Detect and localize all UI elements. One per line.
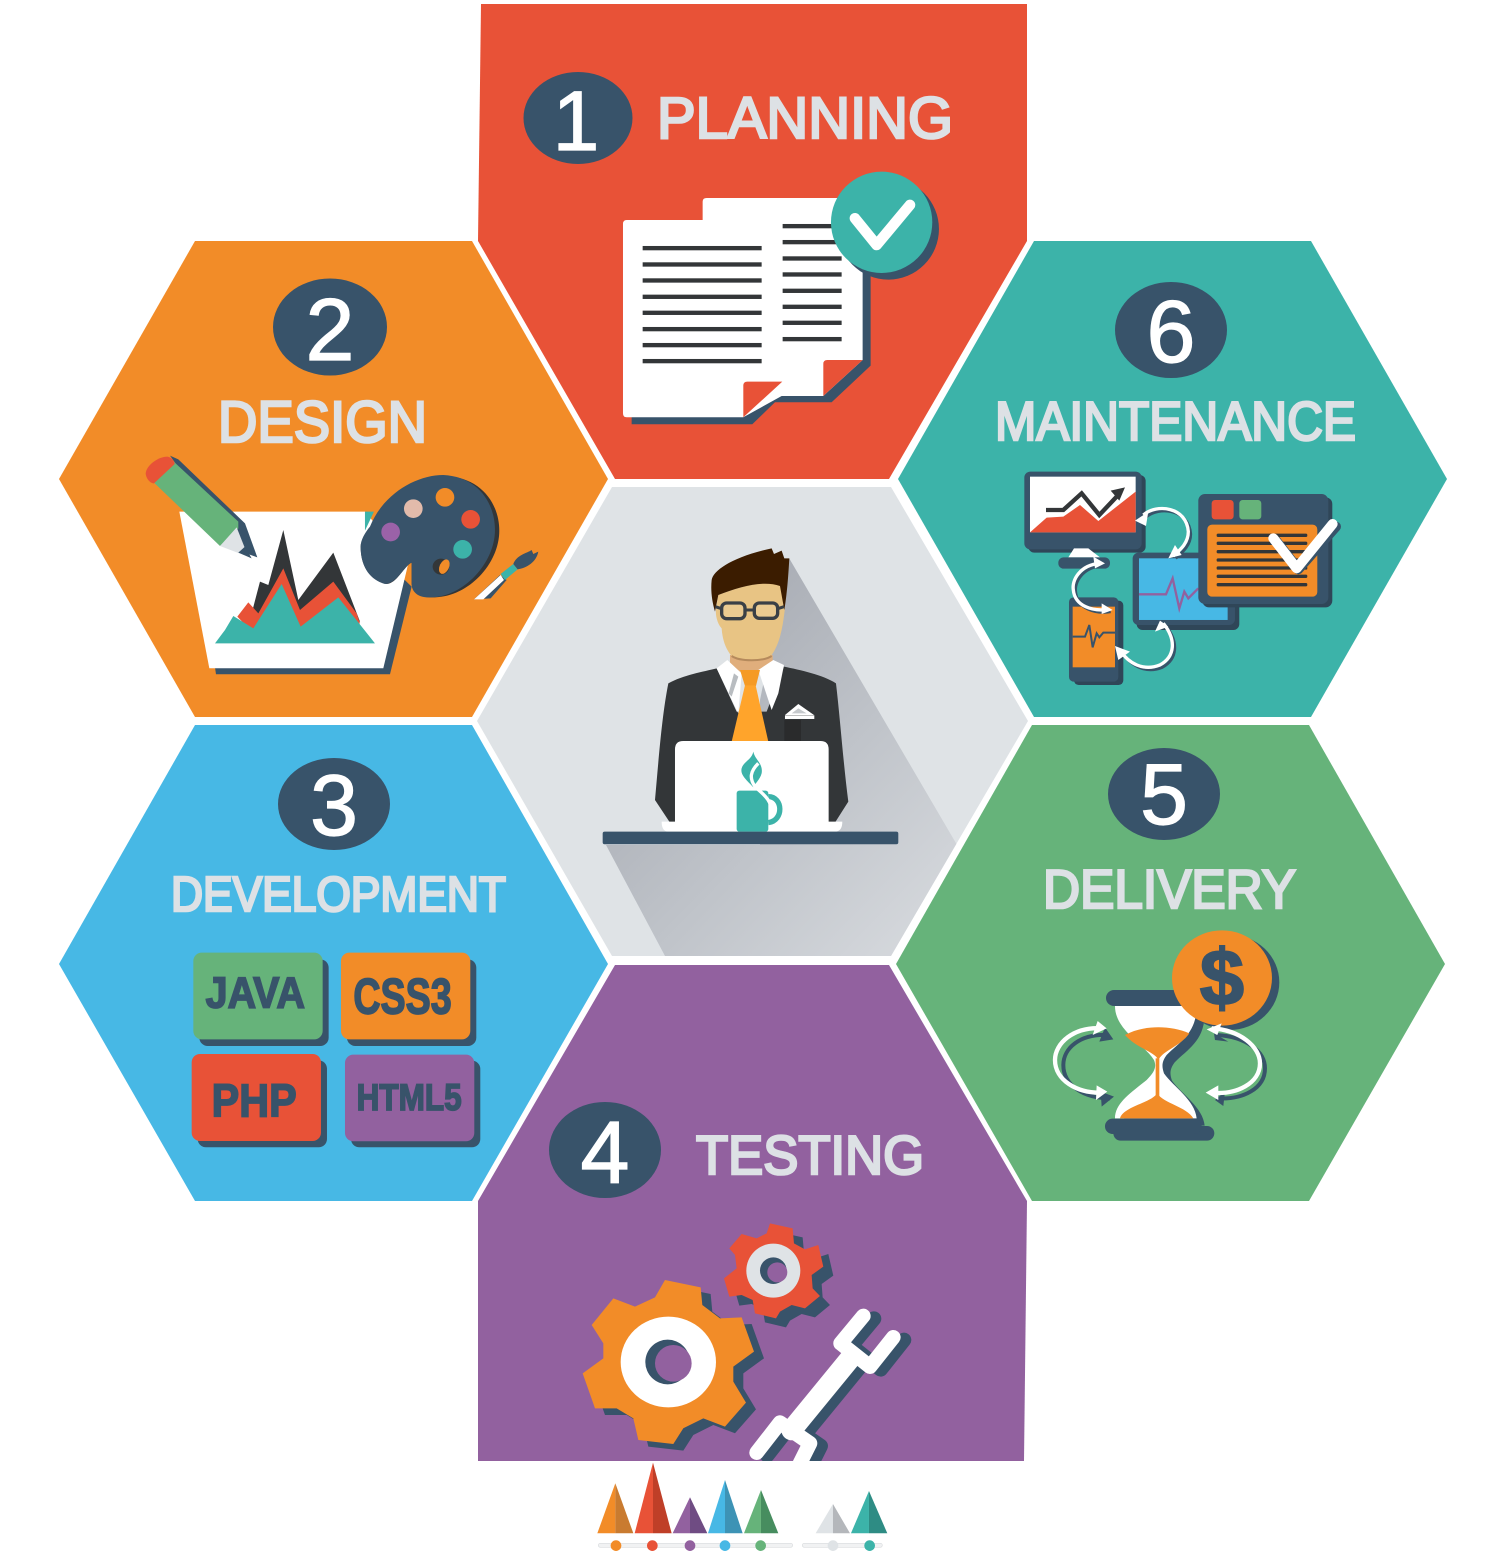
- triangle: orange: [597, 1483, 633, 1551]
- heading: planning: PLANNING: [657, 86, 953, 151]
- heading: development: DEVELOPMENT: [171, 868, 506, 922]
- icon: businessman at laptop: [603, 548, 898, 844]
- icon: documents with check mark: [623, 172, 939, 424]
- triangle: teal: [851, 1491, 887, 1551]
- panel: 3 development: [59, 725, 608, 1201]
- tile: css3: CSS3: [353, 968, 452, 1024]
- number badge 3: 3: [310, 758, 358, 854]
- number badge 6: 6: [1147, 282, 1195, 381]
- number badge 4: 4: [581, 1103, 629, 1202]
- tile: php: PHP: [212, 1075, 297, 1127]
- heading: maintenance: MAINTENANCE: [995, 390, 1356, 452]
- number badge 2: 2: [306, 280, 354, 379]
- planning hexagon background: [478, 4, 1027, 479]
- number badge 5: 5: [1140, 747, 1188, 843]
- footer mountain chart: [597, 1463, 887, 1551]
- number badge 5: [1108, 747, 1220, 843]
- delivery hexagon background: [896, 725, 1445, 1201]
- triangle: grey: [816, 1504, 850, 1551]
- design hexagon background: [59, 241, 608, 717]
- heading: testing: TESTING: [696, 1124, 924, 1186]
- panel: 2 design: [59, 241, 608, 717]
- number badge 3: [278, 758, 390, 854]
- icon: hourglass with coin: [1055, 930, 1279, 1141]
- icon: hourglass with coin: $: [1200, 933, 1244, 1022]
- tile: java: JAVA: [206, 970, 305, 1018]
- center hexagon background: [477, 487, 1028, 956]
- icon: gears and wrench: [583, 1223, 904, 1466]
- number badge 1: 1: [553, 74, 599, 168]
- panel: 5 delivery: [896, 725, 1445, 1201]
- maintenance hexagon background: [898, 241, 1447, 717]
- number badge 2: [273, 278, 387, 379]
- tile: java: [193, 953, 329, 1046]
- number badge 4: [549, 1102, 661, 1202]
- panel: 4 testing: [478, 965, 1027, 1466]
- testing hexagon background: [478, 965, 1027, 1461]
- tile: css3: [341, 953, 476, 1046]
- heading: delivery: DELIVERY: [1043, 858, 1296, 920]
- slider tracks: [598, 1543, 882, 1547]
- code language tiles: [192, 953, 480, 1147]
- triangle: blue: [708, 1480, 743, 1551]
- long shadow: [606, 558, 960, 956]
- development hexagon background: [59, 725, 608, 1201]
- heading: design: DESIGN: [218, 390, 427, 455]
- triangle: green: [744, 1490, 778, 1551]
- tile: html5: [345, 1055, 480, 1147]
- panel: 1 planning: [478, 4, 1027, 479]
- tile: php: [192, 1054, 327, 1147]
- panel: 6 maintenance: [898, 241, 1447, 717]
- number badge 6: [1115, 282, 1227, 381]
- triangle: red: [635, 1463, 672, 1551]
- panel: center manager: [477, 487, 1028, 956]
- icon: pencil, chart and palette: [146, 456, 538, 674]
- tile: html5: HTML5: [357, 1076, 462, 1118]
- number badge 1: [524, 72, 632, 168]
- icon: connected devices: [1024, 472, 1336, 685]
- triangle: purple: [673, 1497, 707, 1551]
